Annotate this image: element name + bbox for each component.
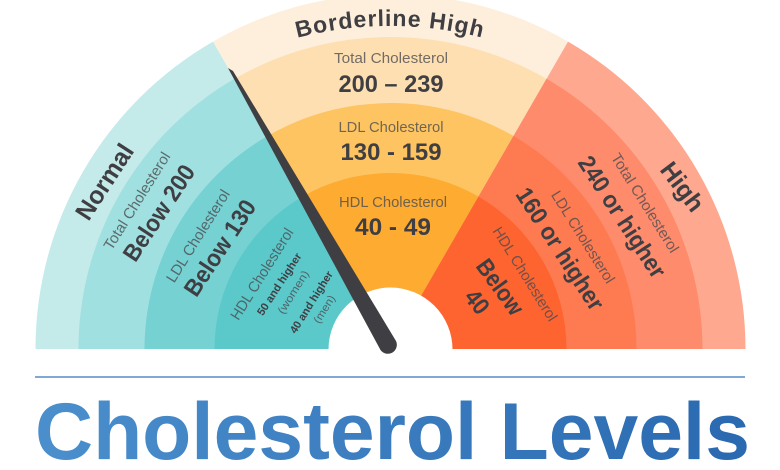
normal: total cholesterol: Total Cholesterol [101,149,174,253]
divider rule [35,376,745,378]
borderline: HDL cholesterol: HDL Cholesterol [339,194,447,211]
high: total cholesterol: 240 or higher [572,151,671,283]
needle [228,68,397,354]
gauge: high sector [390,42,746,349]
high: total cholesterol: Total Cholesterol [607,150,682,256]
normal: HDL cholesterol: (women) [276,269,312,316]
high: HDL cholesterol: Below [470,254,529,321]
high: LDL cholesterol: LDL Cholesterol [547,188,618,287]
normal: HDL cholesterol: 40 and higher [288,269,336,336]
borderline: LDL cholesterol [338,119,444,166]
normal: HDL cholesterol: HDL Cholesterol [227,225,297,323]
gauge: borderline high sector [213,0,568,349]
borderline: LDL cholesterol: 130 - 159 [340,139,442,166]
gauge: normal sector [36,42,390,349]
high: LDL cholesterol: 160 or higher [510,183,609,316]
high: HDL cholesterol: HDL Cholesterol [489,224,560,325]
gauge centre hole [328,287,452,350]
borderline: LDL cholesterol: LDL Cholesterol [338,119,444,136]
normal: HDL cholesterol [227,225,338,336]
high: HDL cholesterol: 40 [459,285,495,320]
normal: HDL cholesterol: (men) [312,293,338,326]
normal: LDL cholesterol: Below 130 [179,195,262,302]
borderline: HDL cholesterol: 40 - 49 [355,214,431,241]
label: Borderline High: Borderline High [295,9,482,38]
borderline: HDL cholesterol [339,194,447,241]
normal: LDL cholesterol: LDL Cholesterol [163,187,234,286]
high: HDL cholesterol [459,224,560,325]
borderline: total cholesterol [334,50,448,98]
label: High: High [654,157,710,217]
borderline: total cholesterol: Total Cholesterol [334,50,448,67]
borderline: total cholesterol: 200 – 239 [338,71,444,98]
normal: total cholesterol: Below 200 [118,160,201,267]
label: Normal: Normal [70,139,140,225]
normal: HDL cholesterol: 50 and higher [255,250,305,318]
